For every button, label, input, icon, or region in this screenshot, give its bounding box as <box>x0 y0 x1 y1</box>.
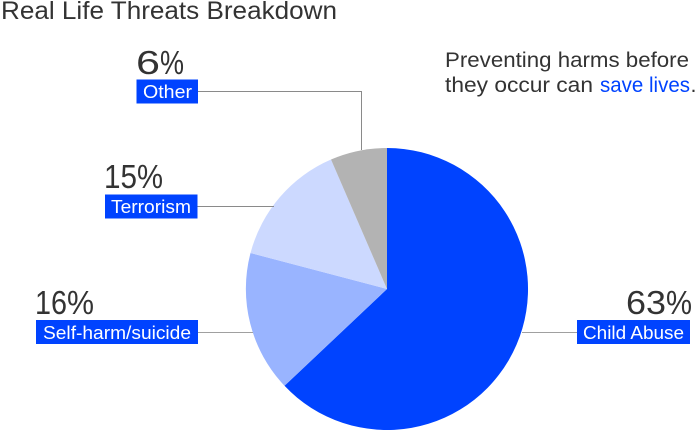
note: preventing harms <box>445 48 696 97</box>
label: self-harm/suicide: Self-harm/suicide <box>43 322 191 343</box>
label: self-harm/suicide <box>35 284 198 344</box>
label: terrorism: % <box>137 158 163 195</box>
leader line: other <box>198 92 362 150</box>
note: preventing harms: . <box>690 73 696 97</box>
label: child abuse: % <box>666 284 692 321</box>
pie chart <box>246 148 528 430</box>
label: terrorism: Terrorism <box>111 196 191 217</box>
label: self-harm/suicide: % <box>67 284 94 321</box>
slice: child abuse 63% <box>284 148 528 430</box>
slice: other 6% <box>331 148 387 289</box>
slice: terrorism 15% <box>250 160 387 289</box>
note: preventing harms: Preventing harms before <box>445 48 689 72</box>
label: child abuse <box>577 284 692 344</box>
label: self-harm/suicide: 16 <box>35 284 67 321</box>
label: other: Other <box>143 81 192 102</box>
note: preventing harms: they occur can <box>445 73 593 97</box>
label: other: 6 <box>136 44 160 81</box>
label: terrorism <box>104 158 198 218</box>
label: other: % <box>160 44 184 81</box>
leader line: terrorism <box>197 206 274 208</box>
label: terrorism: 15 <box>104 158 137 195</box>
leader line: child abuse <box>522 332 577 334</box>
label: child abuse: 63 <box>626 284 666 321</box>
label: child abuse: Child Abuse <box>583 322 684 343</box>
label: other <box>136 44 198 104</box>
note: preventing harms: save lives <box>600 73 690 97</box>
leader line: self-harm/suicide <box>198 332 253 334</box>
slice: self-harm/suicide 16% <box>246 253 387 386</box>
